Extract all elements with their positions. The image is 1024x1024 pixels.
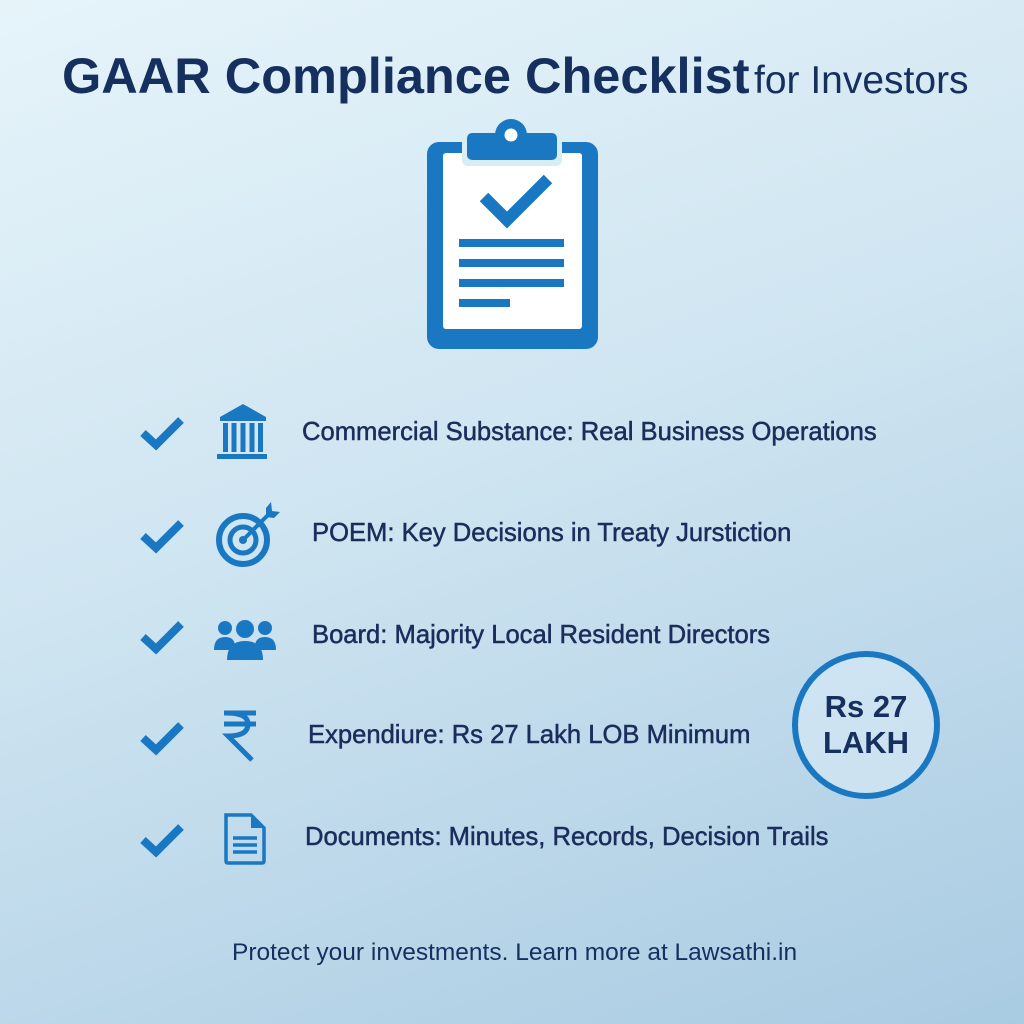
icon: check xyxy=(140,722,184,756)
row 5: documents: Documents: Minutes, Records, Decision Trails xyxy=(305,823,828,851)
icon: bank xyxy=(217,404,267,459)
icon: clipboard xyxy=(427,119,598,349)
icon: people xyxy=(214,620,276,660)
row 3: board xyxy=(140,620,770,660)
callout: Rs 27 Lakh badge: LAKH xyxy=(823,725,909,760)
icon: document xyxy=(224,813,266,865)
footer: Protect your investments. Learn more at Lawsathi.in xyxy=(232,939,797,966)
row 5: documents xyxy=(140,813,828,865)
callout: Rs 27 Lakh badge xyxy=(792,651,940,799)
row 4: expenditure xyxy=(140,710,750,762)
row 2: POEM: POEM: Key Decisions in Treaty Jurstiction xyxy=(312,519,791,547)
icon: check xyxy=(140,417,184,450)
icon: check xyxy=(140,621,184,654)
row 2: POEM xyxy=(140,502,791,567)
callout: Rs 27 Lakh badge: Rs 27 xyxy=(825,689,907,724)
row 3: board: Board: Majority Local Resident Directors xyxy=(312,621,770,649)
icon: target xyxy=(216,502,280,567)
row 1: commercial substance xyxy=(140,404,877,459)
icon: rupee xyxy=(222,710,256,762)
icon: check xyxy=(140,520,184,554)
row 1: commercial substance: Commercial Substance: Real Business Operations xyxy=(302,418,877,446)
title: GAAR Compliance Checklist for Investors xyxy=(62,47,969,104)
row 4: expenditure: Expendiure: Rs 27 Lakh LOB Minimum xyxy=(308,721,750,749)
icon: check xyxy=(140,824,184,858)
